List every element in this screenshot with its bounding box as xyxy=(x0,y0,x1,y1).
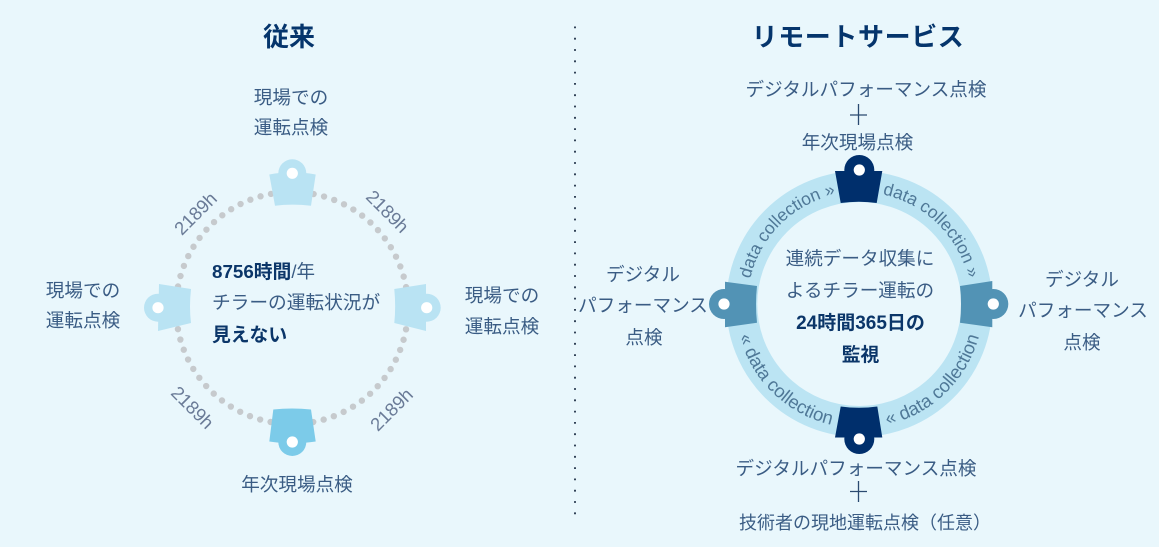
center text: conventional: チラーの運転状況が xyxy=(212,292,380,313)
label: hours bottom-left: 2189h xyxy=(167,382,218,433)
label: top site check: 現場での xyxy=(254,87,328,108)
label: hours top-left: 2189h xyxy=(170,188,221,239)
icon: top marker xyxy=(269,159,316,206)
label: right digital performance check xyxy=(1018,269,1148,353)
label: right digital performance check: デジタル xyxy=(1045,269,1119,290)
ring label: top-right: data collection » xyxy=(884,184,976,276)
center text: remote service xyxy=(786,248,934,365)
panel: conventional xyxy=(46,22,540,495)
ring label: bottom-right: « data collection xyxy=(886,335,979,423)
label: annual site check: 年次現場点検 xyxy=(241,474,353,495)
center text: conventional xyxy=(212,261,380,345)
label: left digital performance check: パフォーマンス xyxy=(578,295,708,316)
center text: conventional: 8756時間/年 xyxy=(212,261,315,282)
icon: bottom marker xyxy=(269,408,316,456)
label: top checks: デジタルパフォーマンス点検 xyxy=(746,79,987,100)
data collection ring xyxy=(742,186,977,422)
icon: right marker xyxy=(394,284,441,331)
heading: remote service: リモートサービス xyxy=(752,22,964,52)
center text: remote service: 監視 xyxy=(842,344,879,365)
label: left digital performance check: 点検 xyxy=(625,327,663,348)
label: bottom checks: デジタルパフォーマンス点検 xyxy=(736,458,977,479)
label: right site check: 現場での xyxy=(465,285,539,306)
icon: top marker xyxy=(835,155,882,203)
label: right digital performance check: パフォーマンス xyxy=(1018,300,1148,321)
heading: conventional: 従来 xyxy=(263,22,315,52)
ring label: top-left: data collection » xyxy=(740,188,834,278)
label: top site check xyxy=(254,87,329,138)
panel: remote service xyxy=(578,22,1148,533)
ring label: bottom-left: « data collection xyxy=(742,335,832,424)
icon: bottom marker xyxy=(835,406,882,454)
label: right site check: 運転点検 xyxy=(465,316,540,337)
label: top checks: 年次現場点検 xyxy=(802,132,914,153)
icon: left marker xyxy=(144,284,191,331)
label: right site check xyxy=(465,285,540,337)
label: left digital performance check xyxy=(578,264,708,348)
center text: remote service: 連続データ収集に xyxy=(786,248,934,269)
icon: right marker xyxy=(960,281,1008,327)
label: top site check: 運転点検 xyxy=(254,117,329,138)
dotted cycle ring xyxy=(176,192,408,424)
label: bottom checks xyxy=(736,458,991,533)
label: left site check: 運転点検 xyxy=(46,310,121,331)
label: bottom checks: 技術者の現地運転点検（任意） xyxy=(739,513,991,533)
label: left digital performance check: デジタル xyxy=(606,264,680,285)
label: top checks xyxy=(746,79,987,153)
label: left site check xyxy=(46,280,121,331)
label: right digital performance check: 点検 xyxy=(1063,332,1101,353)
center text: remote service: よるチラー運転の xyxy=(786,280,934,301)
label: hours top-right: 2189h xyxy=(362,186,413,237)
label: hours bottom-right: 2189h xyxy=(366,384,417,435)
center text: remote service: 24時間365日の xyxy=(796,312,925,334)
label: left site check: 現場での xyxy=(46,280,120,301)
icon: left marker xyxy=(709,282,757,327)
center text: conventional: 見えない xyxy=(212,324,287,345)
